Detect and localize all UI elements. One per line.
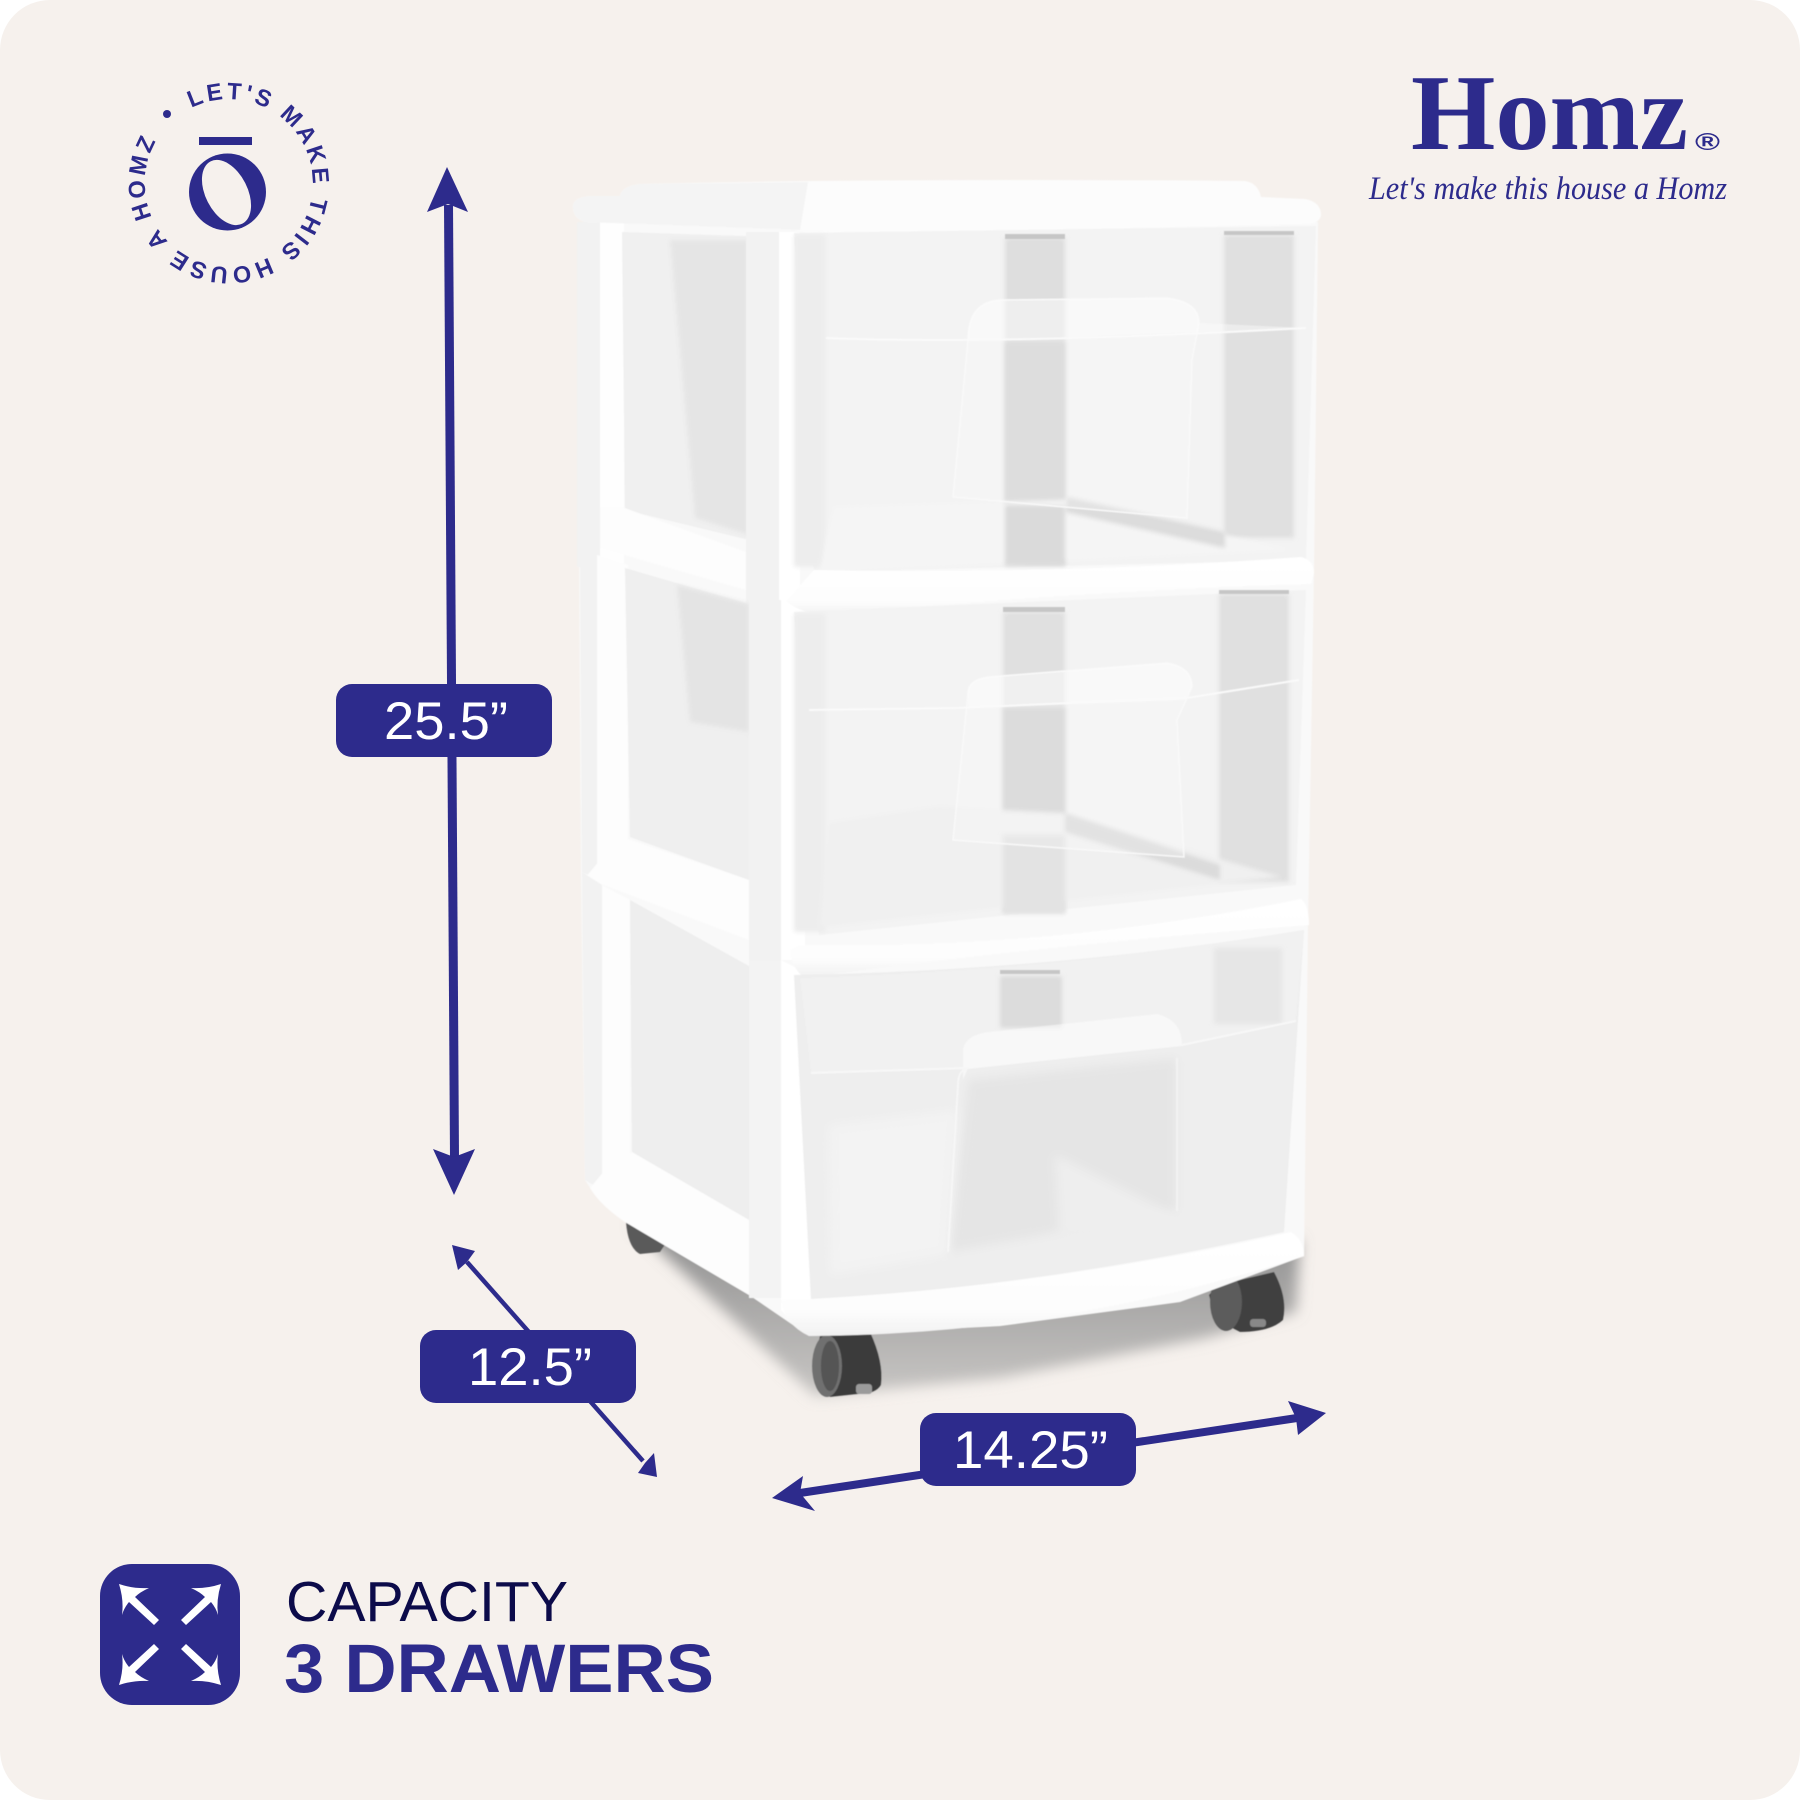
wheel: back left xyxy=(626,1222,668,1254)
capacity heading: CAPACITY xyxy=(286,1570,568,1634)
drawer 2 top tabs xyxy=(1003,590,1289,612)
drawer 1 xyxy=(794,226,1316,572)
depth arrow xyxy=(452,1245,657,1477)
drawer 3 upper band xyxy=(800,930,1304,1073)
drawer 3 lower interior xyxy=(948,1058,1177,1252)
lid xyxy=(573,180,1321,236)
width arrow right head xyxy=(1288,1401,1326,1435)
drawer 1 floor xyxy=(819,500,1291,572)
width arrow xyxy=(772,1401,1326,1511)
lip 1 xyxy=(786,557,1314,616)
height arrow top head xyxy=(427,167,468,212)
bottom lip xyxy=(781,1232,1304,1336)
drawer 1 shelf pillar xyxy=(1005,238,1065,566)
logo: Homz wordmark xyxy=(1368,54,1727,207)
product: three drawer cart xyxy=(573,180,1321,1397)
floor shadow xyxy=(632,1225,1300,1396)
badge: o mark ring xyxy=(189,154,266,230)
wheel: front right xyxy=(1209,1272,1284,1332)
badge: o mark bar xyxy=(199,137,252,145)
drawer 3 handle xyxy=(963,1014,1182,1080)
side frame: tier 1 xyxy=(577,222,800,604)
height arrow bottom head xyxy=(433,1149,475,1195)
label: depth 12.5 xyxy=(420,1330,636,1403)
drawer 2 floor xyxy=(819,807,1281,927)
drawer 2 handle xyxy=(953,663,1192,857)
drawer 3 top tab xyxy=(1000,970,1060,974)
registered mark: ® xyxy=(1695,129,1720,156)
depth arrow top head xyxy=(452,1245,475,1270)
drawer 1 handle xyxy=(953,298,1199,518)
tagline: Let's make this house a Homz xyxy=(1368,171,1727,207)
drawer 3 xyxy=(794,930,1304,1300)
height arrow xyxy=(427,167,475,1195)
badge: dot xyxy=(163,110,171,118)
drawer 1 top tabs xyxy=(1005,231,1294,239)
label: depth 12.5: 12.5” xyxy=(468,1338,592,1397)
label: width 14.25 xyxy=(920,1413,1136,1486)
side frame: tier 3 xyxy=(582,872,814,1335)
cart body silhouette xyxy=(577,222,1318,1336)
label: height 25.5 xyxy=(336,684,552,757)
label: height 25.5: 25.5” xyxy=(384,692,508,751)
capacity value: 3 DRAWERS xyxy=(284,1630,714,1707)
label: width 14.25: 14.25” xyxy=(953,1421,1108,1480)
wordmark text: Homz xyxy=(1411,54,1688,173)
depth arrow bottom head xyxy=(638,1453,657,1477)
logo: circular badge xyxy=(128,82,330,284)
icon: capacity expand arrows xyxy=(100,1564,240,1705)
width arrow left head xyxy=(772,1476,815,1511)
lip 2 xyxy=(790,899,1309,978)
side frame: tier 2 xyxy=(580,552,805,960)
drawer 3 shelf pillar xyxy=(1000,976,1062,1028)
wheel: front left xyxy=(812,1332,882,1397)
badge: o mark counter xyxy=(192,152,261,233)
drawer 2 xyxy=(794,590,1306,935)
drawer 2 shelf pillar xyxy=(1003,612,1065,913)
badge: circular slogan: LET'S MAKE THIS HOUSE A HOMZ xyxy=(128,82,330,284)
